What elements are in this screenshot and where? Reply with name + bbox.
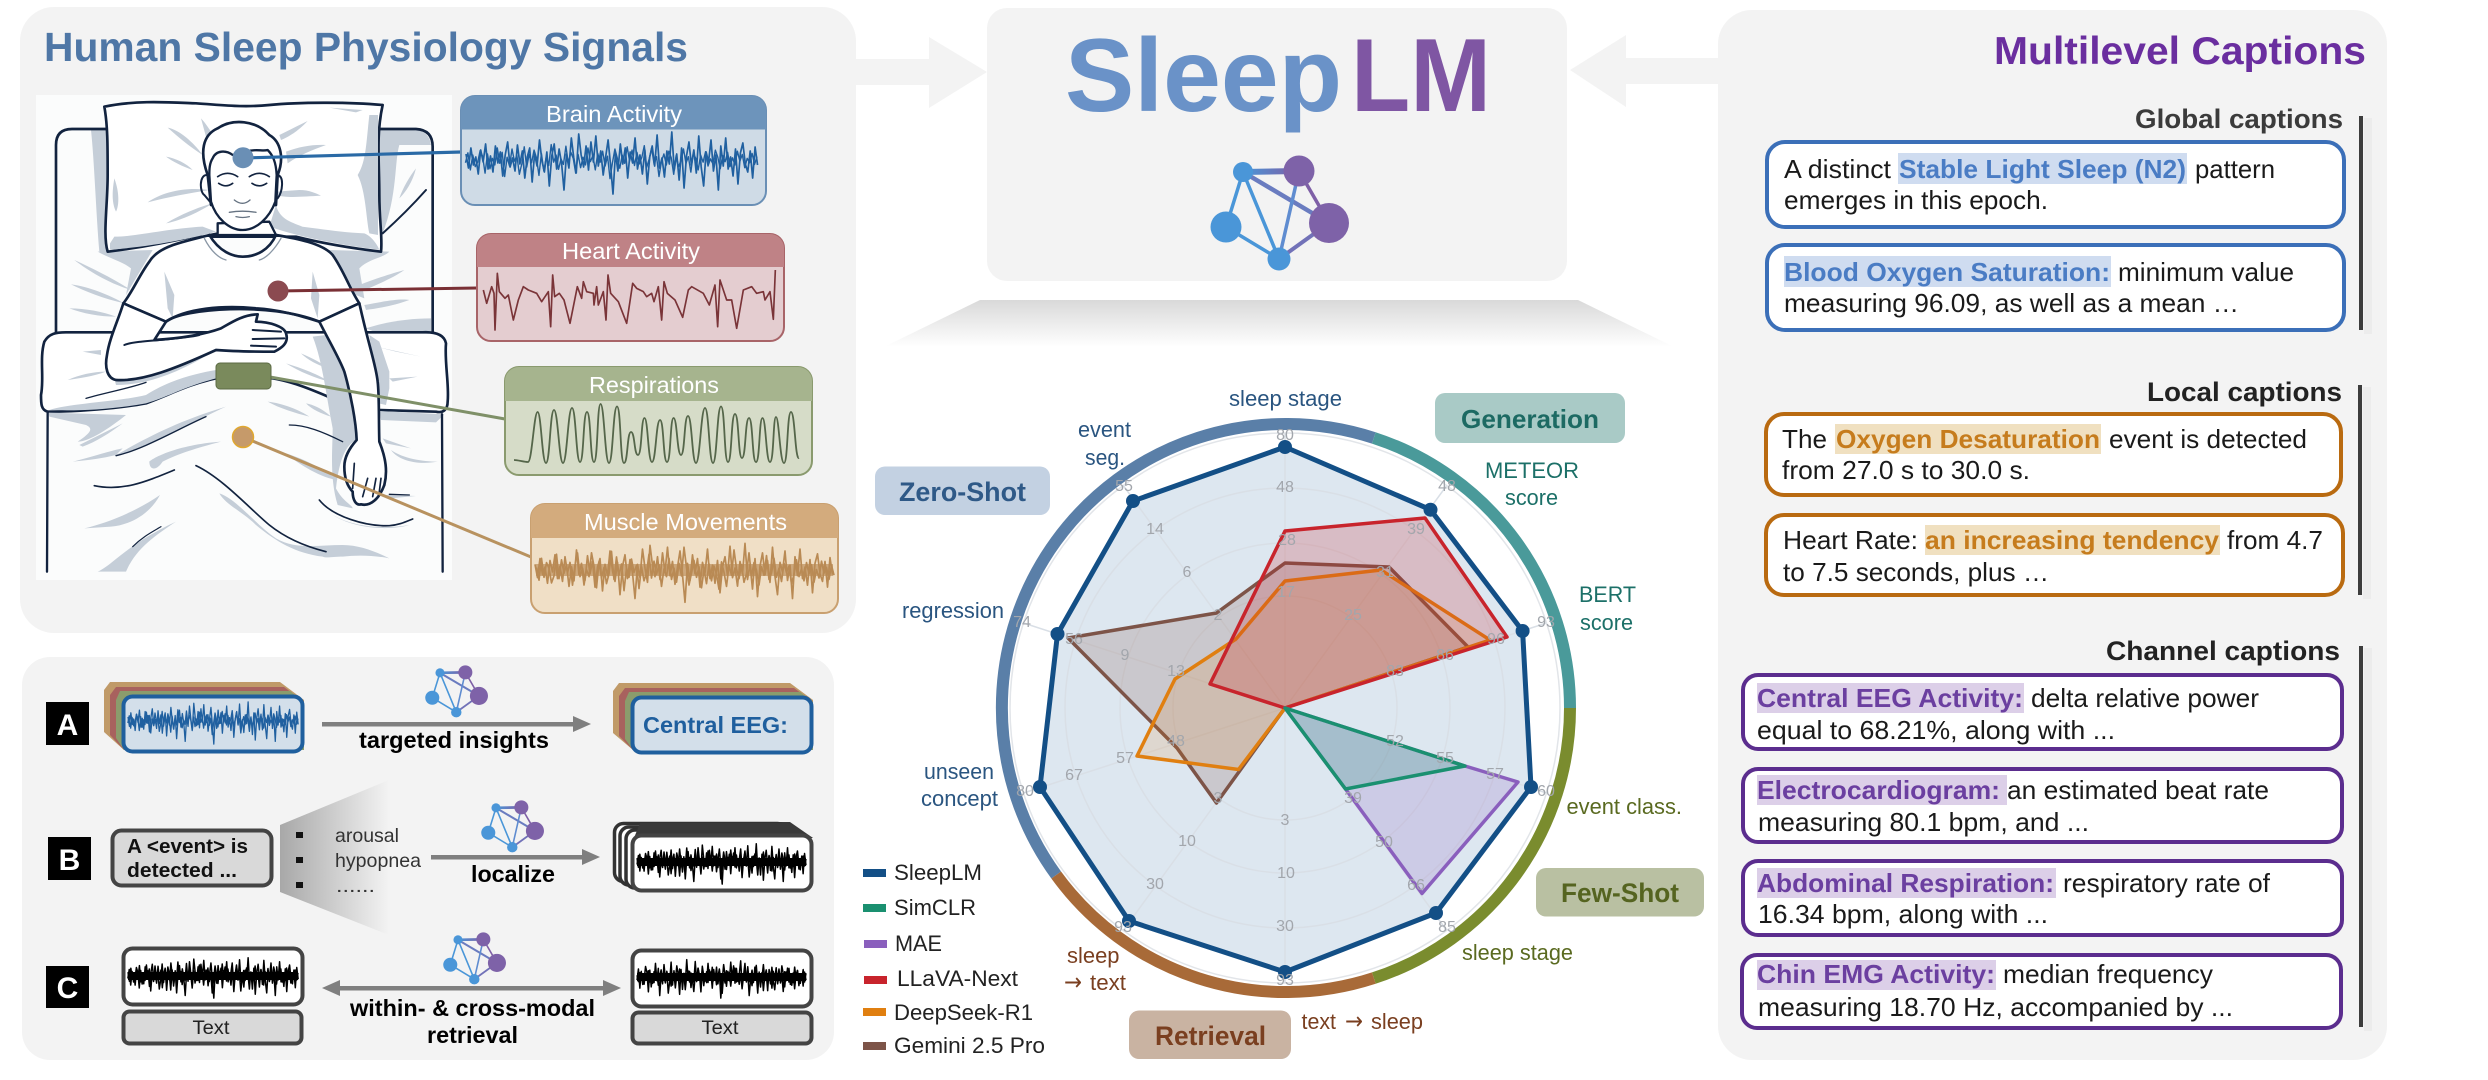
Gemini polygon xyxy=(1068,563,1468,803)
section: local captions xyxy=(1766,377,2371,599)
axis labels: retrieval: → xyxy=(1064,968,1082,996)
axis tick values: 80 xyxy=(1016,783,1034,800)
badge: Zero-Shot xyxy=(875,466,1050,515)
caption box: chin EMG: Chin EMG Activity: xyxy=(1757,959,1995,989)
SleepLM polygon xyxy=(1040,447,1531,972)
axis labels: retrieval: sleep xyxy=(1371,1009,1423,1034)
label: within and cross-modal retrieval: within- & cross-modal xyxy=(349,995,595,1021)
axis tick values: 2 xyxy=(1214,607,1223,624)
connector: brain sensor xyxy=(232,147,461,168)
axis tick values: 10 xyxy=(1178,833,1196,850)
axis labels: zero-shot: concept xyxy=(921,786,998,811)
title: SleepLM xyxy=(1065,18,1491,134)
MAE polygon xyxy=(1285,708,1518,894)
callout: brain activity xyxy=(461,96,766,205)
axis labels: few-shot: event class. xyxy=(1566,794,1682,819)
axis tick values: 48 xyxy=(1167,733,1185,750)
axis labels: generation: score xyxy=(1505,485,1558,510)
section: local captions: Local captions xyxy=(2147,377,2342,407)
legend: SimCLR xyxy=(894,895,976,920)
caption stack A xyxy=(613,683,813,752)
connector: muscle sensor xyxy=(232,426,531,557)
title: SleepLM: LM xyxy=(1351,18,1491,134)
badge B: B xyxy=(59,844,80,877)
icon: SleepLM network logo xyxy=(1210,156,1349,270)
event list funnel: hypopnea xyxy=(335,850,421,872)
caption box: stable light sleep: emerges in this epoch. xyxy=(1784,185,2048,215)
badge C: C xyxy=(57,972,78,1005)
axis labels: zero-shot: event xyxy=(1078,417,1131,442)
localized signal stack xyxy=(614,822,813,890)
axis tick values: 55 xyxy=(1115,478,1133,495)
axis tick values: 3 xyxy=(1214,790,1223,807)
axis tick values: 25 xyxy=(1344,607,1362,624)
caption box: abdominal respiration: Abdominal Respiration: xyxy=(1757,868,2054,898)
radar outer grid ring xyxy=(1010,433,1560,983)
SimCLR polygon xyxy=(1285,708,1465,789)
caption box: blood oxygen saturation xyxy=(1767,245,2344,330)
caption box: stable light sleep xyxy=(1767,142,2344,227)
caption box: central EEG xyxy=(1743,675,2342,749)
panel: human sleep physiology signals xyxy=(20,7,856,633)
callout: brain activity: Brain Activity xyxy=(546,101,683,127)
label: within and cross-modal retrieval xyxy=(349,995,595,1048)
caption box: oxygen desaturation: Oxygen Desaturation xyxy=(1836,424,2100,454)
badge A: A xyxy=(57,709,78,742)
axis tick values: 48 xyxy=(1438,478,1456,495)
axis tick values: 39 xyxy=(1407,521,1425,538)
axis labels: retrieval xyxy=(1064,943,1423,1035)
caption box: stable light sleep: Stable Light Sleep (N2) xyxy=(1899,154,2186,184)
section: channel captions xyxy=(1742,636,2372,1031)
projection funnel under model xyxy=(884,300,1674,347)
axis tick values: 28 xyxy=(1278,532,1296,549)
axis tick values: 30 xyxy=(1276,918,1294,935)
panel: SleepLM model xyxy=(987,8,1567,281)
caption box: oxygen desaturation: event is detected xyxy=(2109,424,2307,454)
SleepLM data points xyxy=(1033,440,1538,979)
event list funnel xyxy=(280,780,421,935)
caption box: oxygen desaturation: The xyxy=(1782,424,1827,454)
caption box: heart rate tendency: to 7.5 seconds, plus … xyxy=(1783,557,2049,587)
logo A xyxy=(425,665,488,717)
section: channel captions: Channel captions xyxy=(2106,636,2340,666)
axis labels: retrieval: sleep xyxy=(1067,943,1120,968)
LLaVA polygon xyxy=(1210,518,1507,708)
legend xyxy=(863,860,1045,1058)
radar ring segments xyxy=(1002,424,1570,992)
axis tick values: 96 xyxy=(1487,631,1505,648)
axis labels: generation: BERT xyxy=(1579,582,1636,607)
badge: Generation: Generation xyxy=(1461,404,1599,434)
axis tick values: 30 xyxy=(1146,876,1164,893)
axis tick values: 93 xyxy=(1114,919,1132,936)
radar chart xyxy=(875,386,1704,1059)
axis labels: retrieval: text xyxy=(1090,970,1126,995)
event list funnel: ...... xyxy=(336,875,375,897)
caption box: chin EMG: measuring 18.70 Hz, accompanied by ... xyxy=(1758,992,2233,1022)
legend: DeepSeek-R1 xyxy=(894,1000,1033,1025)
connector: respiration belt xyxy=(216,363,505,419)
badge: Few-Shot: Few-Shot xyxy=(1561,878,1679,908)
axis tick values: 31 xyxy=(1376,564,1394,581)
axis tick values: 86 xyxy=(1436,647,1454,664)
caption box: oxygen desaturation xyxy=(1766,414,2341,495)
axis tick values: 83 xyxy=(1386,663,1404,680)
axis tick values: 93 xyxy=(1537,614,1555,631)
caption box: blood oxygen saturation: minimum value xyxy=(2118,257,2294,287)
badge: Retrieval: Retrieval xyxy=(1155,1021,1266,1051)
axis tick values xyxy=(1013,427,1555,989)
axis tick values: 60 xyxy=(1537,783,1555,800)
legend: LLaVA-Next xyxy=(897,966,1018,991)
axis tick values: 13 xyxy=(1167,663,1185,680)
axis tick values: 56 xyxy=(1065,631,1083,648)
axis tick values: 9 xyxy=(1121,647,1130,664)
caption box: abdominal respiration: 16.34 bpm, along with ... xyxy=(1758,899,2048,929)
caption box: central EEG: Central EEG Activity: xyxy=(1757,683,2023,713)
title: SleepLM: Sleep xyxy=(1065,18,1342,134)
callout: respirations: Respirations xyxy=(589,372,719,398)
badge C xyxy=(46,966,89,1008)
axis labels: generation: METEOR xyxy=(1485,458,1579,483)
event prompt box: detected ... xyxy=(127,859,237,882)
arrow: retrieval double-headed xyxy=(322,980,621,996)
event prompt box xyxy=(112,830,272,886)
legend: MAE xyxy=(895,931,942,956)
axis tick values: 50 xyxy=(1375,834,1393,851)
label: targeted insights: targeted insights xyxy=(359,727,549,753)
signal stack A xyxy=(104,682,304,752)
grid lines xyxy=(1024,433,1546,983)
caption box: heart rate tendency: an increasing tendency xyxy=(1925,525,2220,555)
axis tick values: 52 xyxy=(1386,733,1404,750)
axis tick values: 48 xyxy=(1276,479,1294,496)
caption box: abdominal respiration: respiratory rate of xyxy=(2063,868,2271,898)
caption box: heart rate tendency xyxy=(1766,515,2343,595)
badge: Retrieval xyxy=(1129,1010,1291,1059)
badge A xyxy=(46,702,89,745)
caption box: oxygen desaturation: from 27.0 s to 30.0 s. xyxy=(1782,455,2030,485)
legend: SleepLM xyxy=(894,860,982,885)
event prompt box: A <event> is xyxy=(127,835,248,858)
axis labels: zero-shot: unseen xyxy=(924,759,994,784)
axis labels: zero-shot: seg. xyxy=(1085,445,1125,470)
DeepSeek polygon xyxy=(1137,570,1490,770)
arrow: localize xyxy=(431,849,600,865)
caption stack A: Central EEG: xyxy=(643,712,788,738)
badge: Zero-Shot: Zero-Shot xyxy=(899,477,1026,507)
callout: muscle movements: Muscle Movements xyxy=(584,509,787,535)
caption box: chin EMG xyxy=(1742,955,2341,1028)
caption box: central EEG: equal to 68.21%, along with ... xyxy=(1757,715,2115,745)
axis tick values: 3 xyxy=(1281,812,1290,829)
heading: human sleep physiology signals: Human Sleep Physiology Signals xyxy=(44,24,688,70)
connector: heart sensor xyxy=(268,280,477,302)
caption box: central EEG: delta relative power xyxy=(2031,683,2259,713)
axis tick values: 85 xyxy=(1438,919,1456,936)
caption box: electrocardiogram xyxy=(1743,769,2342,842)
caption box: abdominal respiration xyxy=(1743,861,2342,935)
logo B xyxy=(481,800,544,852)
caption box: heart rate tendency: from 4.7 xyxy=(2227,525,2323,555)
illustration: sleeping person in bed xyxy=(36,95,452,580)
arrow: captions into SleepLM xyxy=(1570,35,1720,107)
panel: task examples xyxy=(22,657,834,1060)
retrieval target xyxy=(632,950,812,1044)
logo C xyxy=(443,932,506,984)
caption box: blood oxygen saturation: Blood Oxygen Saturation: xyxy=(1784,257,2110,287)
caption box: electrocardiogram: measuring 80.1 bpm, and ... xyxy=(1758,807,2089,837)
label: within and cross-modal retrieval: retrieval xyxy=(427,1022,518,1048)
axis labels: few-shot xyxy=(1462,794,1682,965)
axis tick values: 39 xyxy=(1344,790,1362,807)
arrow: signals into SleepLM xyxy=(854,37,987,108)
axis labels: zero-shot: sleep stage xyxy=(1229,386,1342,411)
axis tick values: 74 xyxy=(1013,614,1031,631)
retrieval source: Text xyxy=(192,1018,230,1039)
caption box: electrocardiogram: Electrocardiogram: xyxy=(1757,775,2000,805)
caption box: chin EMG: median frequency xyxy=(2003,959,2213,989)
section: global captions xyxy=(1767,104,2372,334)
badge: Generation xyxy=(1435,393,1625,443)
axis labels: generation xyxy=(1485,458,1636,635)
section: global captions: Global captions xyxy=(2135,104,2343,134)
axis tick values: 6 xyxy=(1183,564,1192,581)
badge B xyxy=(48,837,91,880)
axis labels: zero-shot xyxy=(902,386,1342,811)
caption box: stable light sleep: pattern xyxy=(2195,154,2275,184)
caption box: electrocardiogram: an estimated beat rate xyxy=(2007,775,2269,805)
retrieval source xyxy=(124,948,302,1044)
axis labels: few-shot: sleep stage xyxy=(1462,940,1573,965)
axis labels: generation: score xyxy=(1580,610,1633,635)
badge: Few-Shot xyxy=(1536,868,1704,916)
event list funnel: arousal xyxy=(335,825,399,847)
axis labels: zero-shot: regression xyxy=(902,598,1004,623)
panel: multilevel captions xyxy=(1718,10,2387,1060)
callout: respirations xyxy=(505,367,812,475)
caption box: blood oxygen saturation: measuring 96.09, as well as a mean … xyxy=(1784,288,2239,318)
caption box: stable light sleep: A distinct xyxy=(1784,154,1892,184)
axis tick values: 93 xyxy=(1276,972,1294,989)
axis tick values: 10 xyxy=(1277,865,1295,882)
axis labels: retrieval: → xyxy=(1345,1007,1363,1035)
arrow: targeted insights xyxy=(322,716,591,732)
label: localize: localize xyxy=(471,861,555,887)
legend: Gemini 2.5 Pro xyxy=(894,1033,1045,1058)
caption box: heart rate tendency: Heart Rate: xyxy=(1783,525,1918,555)
callout: heart activity: Heart Activity xyxy=(562,238,700,264)
axis tick values: 67 xyxy=(1065,767,1083,784)
axis tick values: 66 xyxy=(1407,877,1425,894)
axis tick values: 14 xyxy=(1146,521,1164,538)
callout: heart activity xyxy=(477,234,784,341)
axis tick values: 57 xyxy=(1486,766,1504,783)
axis tick values: 55 xyxy=(1436,750,1454,767)
axis labels: retrieval: text xyxy=(1302,1009,1336,1034)
axis tick values: 17 xyxy=(1277,584,1295,601)
callout: muscle movements xyxy=(531,504,838,613)
axis tick values: 57 xyxy=(1116,750,1134,767)
retrieval target: Text xyxy=(702,1018,739,1039)
heading: multilevel captions: Multilevel Captions xyxy=(1994,30,2366,73)
axis tick values: 80 xyxy=(1276,427,1294,444)
